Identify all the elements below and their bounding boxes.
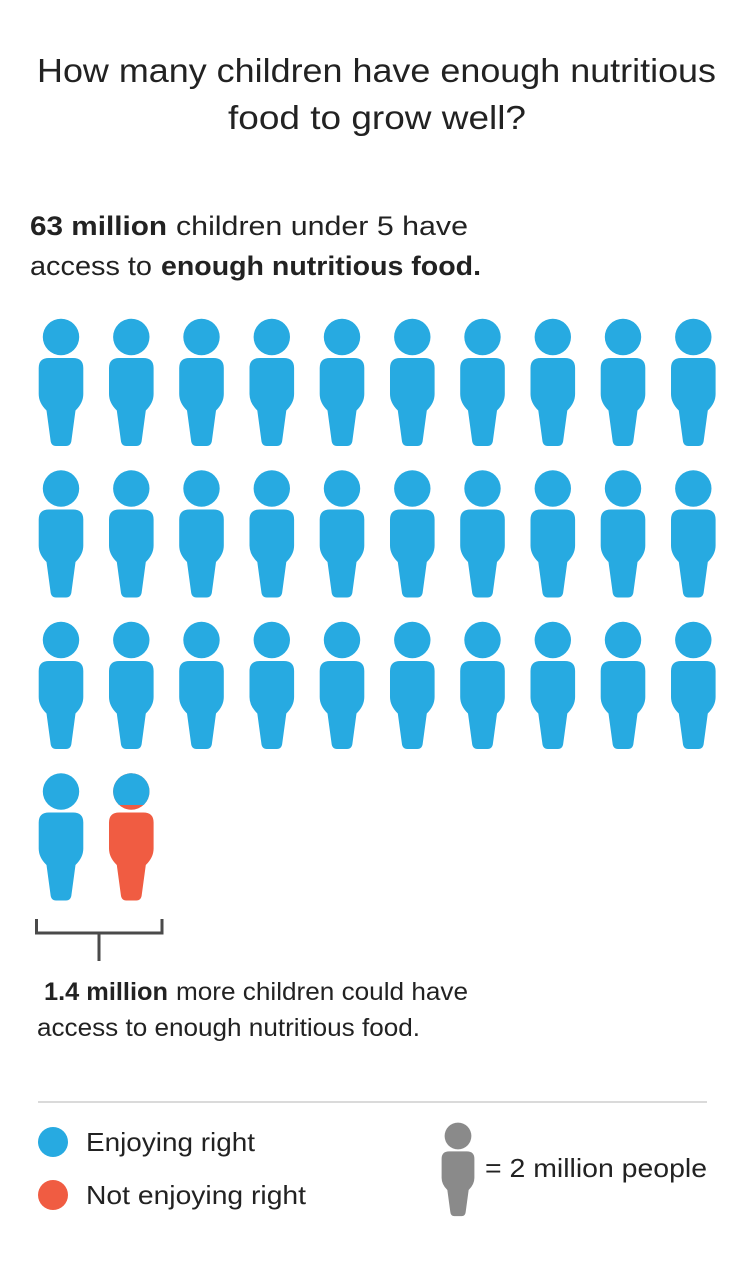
icon: person row 4 red with blue head (109, 773, 154, 900)
icon: person row 1 (39, 319, 716, 446)
legend: person scale (442, 1123, 707, 1216)
text block: 1.4 million more children: more children could have (176, 978, 468, 1006)
text block: 63 million children: access to (30, 251, 152, 281)
icon: person row 4 blue (39, 773, 83, 900)
pictogram: 32 children (39, 319, 716, 900)
text block: 1.4 million more children: 1.4 million (44, 978, 168, 1006)
legend: not enjoying right: Not enjoying right (86, 1180, 307, 1210)
text block: 63 million children: children under 5 have (176, 211, 468, 241)
icon: person row 2 (39, 470, 716, 598)
title (37, 53, 716, 137)
legend: person scale: = 2 million people (485, 1153, 707, 1183)
bracket (36, 919, 162, 961)
title: food to grow well? (228, 100, 526, 137)
title: How many children have enough nutritious (37, 53, 716, 90)
legend: enjoying right: Enjoying right (86, 1127, 256, 1157)
text block: 1.4 million more children (37, 978, 468, 1042)
text block: 1.4 million more children: access to enough nutritious food. (37, 1014, 420, 1042)
text block: 63 million children (30, 211, 481, 281)
text block: 63 million children: 63 million (30, 211, 167, 241)
legend (38, 1123, 707, 1216)
text block: 63 million children: enough nutritious food. (161, 251, 481, 281)
icon: person row 3 (39, 622, 716, 749)
